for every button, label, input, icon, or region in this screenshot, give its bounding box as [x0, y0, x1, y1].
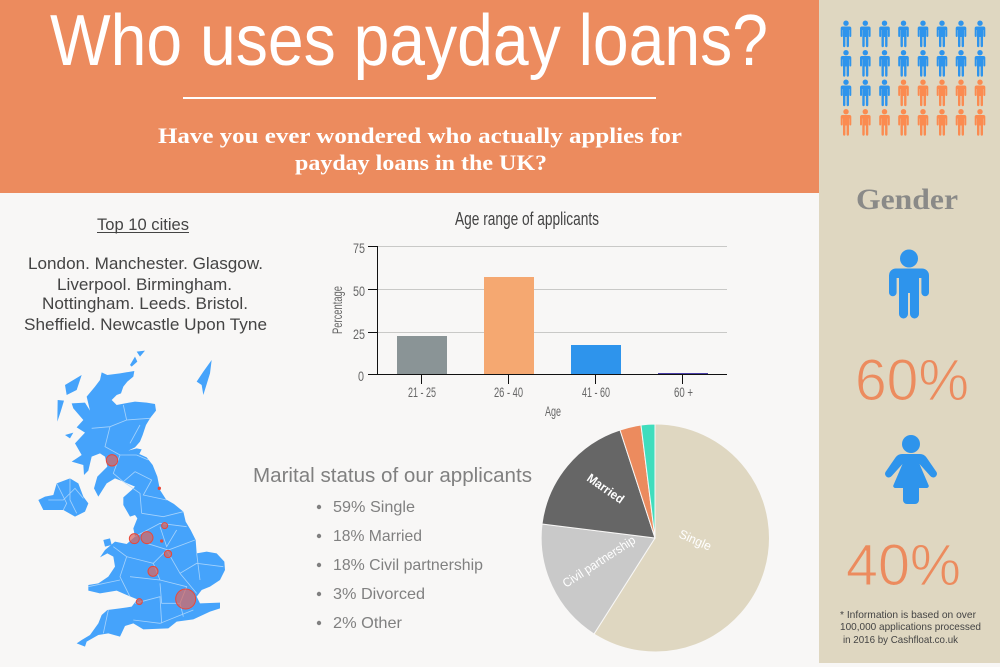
footnote: in 2016 by Cashfloat.co.uk — [843, 634, 959, 646]
pie labels: Married — [584, 471, 627, 507]
bullet list: 2% Other — [333, 615, 403, 632]
city bubbles — [106, 455, 196, 609]
pie labels: Civil partnership — [560, 533, 638, 591]
panel: gender sidebar — [819, 0, 1000, 663]
icon: woman — [885, 435, 937, 504]
pie labels: Single — [677, 527, 714, 554]
axis labels: Age — [545, 403, 561, 419]
county boundaries — [48, 405, 223, 633]
axis labels — [329, 240, 693, 419]
landmass — [38, 351, 225, 647]
city list: Sheffield. Newcastle Upon Tyne — [24, 316, 267, 334]
axis labels: 21 - 25 — [408, 384, 436, 400]
panel: marital status list — [253, 465, 532, 632]
axis labels: Percentage — [329, 286, 345, 334]
heading: top 10 cities: Top 10 cities — [97, 215, 189, 234]
stat: 60 percent: 60% — [855, 348, 969, 413]
panel: header — [0, 0, 819, 193]
panel: top 10 cities — [24, 215, 267, 334]
map: UK with city bubbles — [38, 351, 225, 647]
pie labels — [560, 471, 714, 591]
heading: gender: Gender — [856, 183, 958, 216]
stat: 40 percent: 40% — [846, 533, 961, 598]
axis labels: 60 + — [674, 384, 693, 400]
axis labels: 75 — [353, 240, 365, 256]
city list: Nottingham. Leeds. Bristol. — [42, 295, 248, 313]
axis labels: 25 — [353, 326, 365, 342]
axis labels: 41 - 60 — [582, 384, 610, 400]
footnote — [840, 609, 981, 646]
pie chart: marital status — [541, 424, 769, 652]
heading: marital status: Marital status of our applicants — [253, 465, 532, 487]
city list: London. Manchester. Glasgow. — [28, 255, 263, 273]
icon grid: 60 percent male, 40 percent female — [841, 20, 985, 136]
icon: man — [889, 250, 929, 318]
bar chart: age range of applicants — [329, 209, 727, 419]
title: Who uses payday loans? — [50, 1, 768, 81]
subtitle: payday loans in the UK? — [295, 150, 547, 175]
city list: Liverpool. Birmingham. — [57, 276, 232, 294]
footnote: 100,000 applications processed — [840, 621, 981, 633]
subtitle — [158, 97, 682, 175]
axes — [368, 246, 727, 384]
gridlines — [378, 246, 727, 332]
axis labels: 50 — [353, 283, 365, 299]
chart title: Age range of applicants — [455, 209, 599, 229]
subtitle: Have you ever wondered who actually applies for — [158, 123, 682, 148]
city list — [24, 255, 267, 334]
footnote: * Information is based on over — [840, 609, 976, 621]
axis labels: 0 — [358, 368, 364, 384]
axis labels: 26 - 40 — [494, 384, 523, 400]
bullet list: 18% Married — [333, 528, 422, 545]
bullet list: 59% Single — [333, 499, 415, 516]
bullet list: 3% Divorced — [333, 586, 425, 603]
bars — [397, 277, 708, 374]
bullet list: 18% Civil partnership — [333, 557, 483, 574]
bullet list — [317, 499, 483, 632]
